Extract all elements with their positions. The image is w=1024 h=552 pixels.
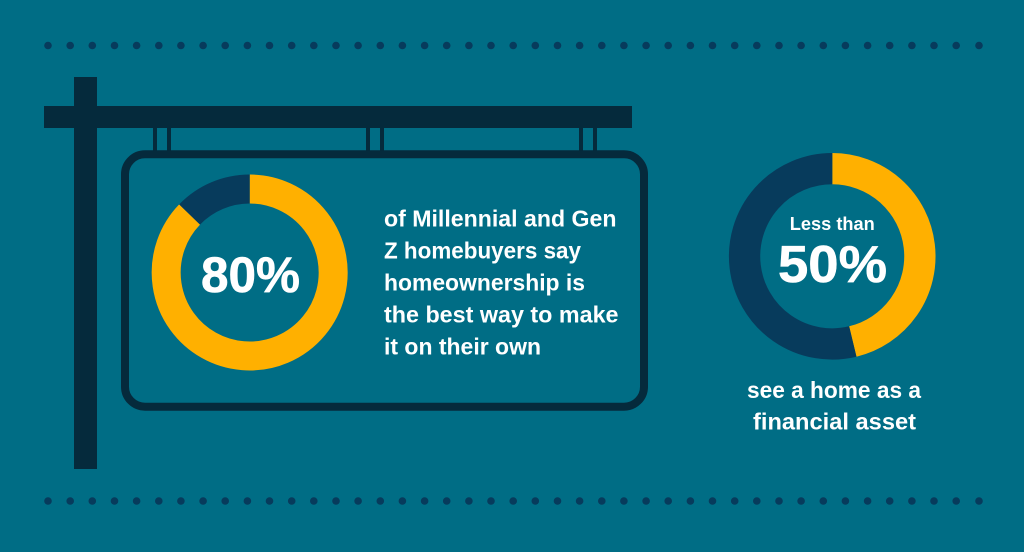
panel: hanging sign [125, 154, 644, 407]
text: sign statement: Z homebuyers say [384, 238, 581, 264]
label: less than: Less than [790, 213, 875, 234]
text: sign statement: homeownership is [384, 270, 585, 296]
chart: 80% donut [166, 189, 333, 356]
text: sign statement: of Millennial and Gen [384, 206, 616, 232]
text: donut caption [747, 377, 922, 434]
text: sign statement: the best way to make [384, 302, 618, 328]
text: donut caption: financial asset [753, 408, 916, 434]
text: sign statement: it on their own [384, 334, 541, 360]
label: 50%: 50% [778, 236, 887, 294]
icon: real-estate signpost [44, 77, 632, 469]
text: sign statement [384, 206, 618, 360]
label: 80%: 80% [201, 247, 300, 303]
chart: less than 50% donut [745, 169, 920, 344]
text: donut caption: see a home as a [747, 377, 922, 403]
